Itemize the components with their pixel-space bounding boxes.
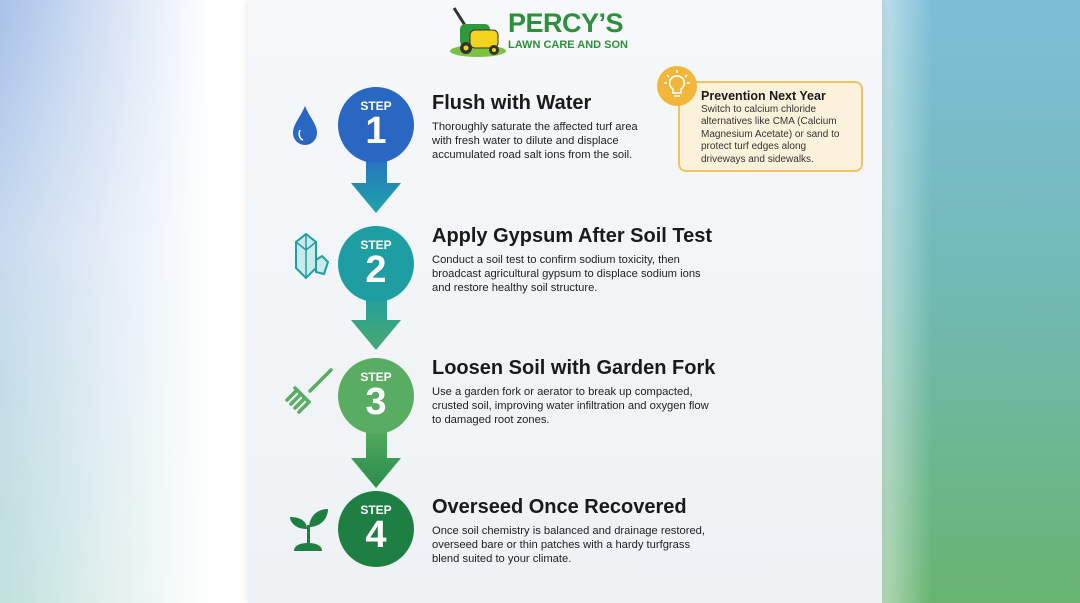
logo <box>450 7 628 57</box>
icon: lawn mower <box>450 7 506 57</box>
icon: lightbulb <box>657 66 697 106</box>
callout: prevention: Switch to calcium chloride <box>701 104 816 115</box>
text: step 4 <box>432 496 705 565</box>
step 1 circle: STEP <box>360 99 392 113</box>
text: step 1: Flush with Water <box>432 92 591 114</box>
step 3 circle <box>338 358 414 434</box>
callout: prevention: Prevention Next Year <box>701 89 826 103</box>
arrows <box>351 161 401 488</box>
step 3 circle: 3 <box>365 381 387 423</box>
step 1 circle <box>338 87 414 163</box>
text: step 1: accumulated road salt ions from the soil. <box>432 149 632 161</box>
text: step 1 <box>432 92 638 161</box>
step 2 circle: STEP <box>360 238 392 252</box>
step 1 circle: 1 <box>365 110 387 152</box>
text: step 1: with fresh water to dilute and displace <box>432 135 619 147</box>
text: step 3: to damaged root zones. <box>432 414 550 426</box>
text: step 1: Thoroughly saturate the affected turf area <box>432 121 638 133</box>
text: step 2: and restore healthy soil structure. <box>432 282 597 294</box>
text: step 3: Use a garden fork or aerator to break up compacted, <box>432 386 693 398</box>
text: step 2 <box>432 225 712 294</box>
icon: seedling <box>290 509 328 551</box>
text: step 4: Once soil chemistry is balanced and drainage restored, <box>432 525 705 537</box>
callout: prevention: alternatives like CMA (Calcium <box>701 116 837 127</box>
step 2 circle <box>338 226 414 302</box>
panel: main <box>248 0 882 603</box>
text: step 2: Apply Gypsum After Soil Test <box>432 225 712 247</box>
text: step 4: Overseed Once Recovered <box>432 496 687 518</box>
step 4 circle: STEP <box>360 503 392 517</box>
step 4 circle: 4 <box>365 514 387 556</box>
callout: prevention: protect turf edges along <box>701 141 806 152</box>
text: step 3 <box>432 357 716 426</box>
icon: crystal <box>295 232 330 280</box>
text: step 4: blend suited to your climate. <box>432 553 571 565</box>
text: step 2: Conduct a soil test to confirm sodium toxicity, then <box>432 254 680 266</box>
callout: prevention <box>678 81 863 172</box>
icon: water drop <box>293 106 317 145</box>
text: step 3: Loosen Soil with Garden Fork <box>432 357 715 379</box>
text: step 4: overseed bare or thin patches with a hardy turfgrass <box>432 539 690 551</box>
text: step 2: broadcast agricultural gypsum to displace sodium ions <box>432 268 701 280</box>
logo: LAWN CARE AND SON <box>508 39 628 51</box>
callout: prevention: driveways and sidewalks. <box>701 154 814 165</box>
step 2 circle: 2 <box>365 249 387 291</box>
callout: prevention: Magnesium Acetate) or sand to <box>701 129 839 140</box>
text: step 3: crusted soil, improving water infiltration and oxygen flow <box>432 400 709 412</box>
icon: garden fork <box>285 368 333 414</box>
heading: brand: PERCY’S <box>508 8 623 38</box>
step 3 circle: STEP <box>360 370 392 384</box>
step 4 circle <box>338 491 414 567</box>
